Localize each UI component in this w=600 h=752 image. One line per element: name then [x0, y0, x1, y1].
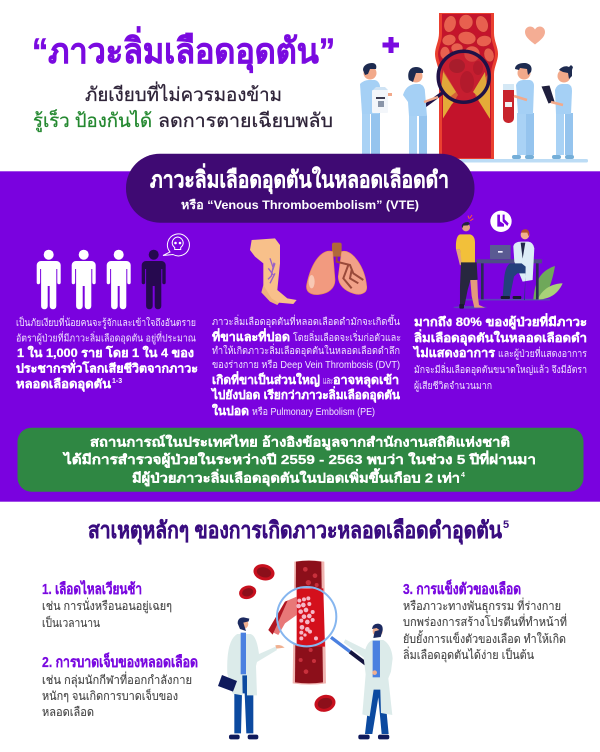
text block: middle column: ทำให้เกิดภาวะลิ่มเลือดอุดตันในหลอดเลือดดำลึก — [212, 343, 400, 357]
text block: cause 1 — [42, 579, 172, 630]
blood cells — [238, 562, 337, 714]
text block: cause 1: 1. เลือดไหลเวียนช้า — [42, 579, 142, 598]
text block: middle column — [210, 314, 401, 418]
callout: Thailand statistics — [18, 428, 584, 492]
panel: dark pill heading: ภาวะลิ่มเลือดอุดตันในหลอดเลือดดำ — [150, 162, 449, 194]
nurse with box — [360, 63, 392, 154]
magnified clot — [268, 587, 381, 675]
callout: Thailand statistics: 4 — [461, 472, 465, 479]
text block: cause 3: ยับยั้งการแข็งตัวของเลือด ทำให้เกิด — [403, 630, 566, 646]
icon: four people, one in four — [37, 234, 189, 309]
text block: left column: อัตราผู้ป่วยที่มีภาวะลิ่มเลือดอุดตัน อยู่ที่ประมาณ — [16, 331, 196, 345]
illustration: doctors examining a clot in a vessel — [218, 560, 393, 739]
text block: right column: มากถึง 80% ของผู้ป่วยที่มีภาวะ — [414, 313, 587, 330]
text block: cause 2: หลอดเลือด — [42, 705, 94, 719]
text block: middle column: โดยลิ่มเลือดจะเริ่มก่อตัวและ — [293, 330, 401, 344]
illustration: patient and doctor at desk — [453, 211, 563, 309]
text block: right column: และผู้ป่วยที่แสดงอาการ — [498, 346, 588, 360]
callout: Thailand statistics: ได้มีการสำรวจผู้ป่วยในระหว่างปี 2559 - 2563 พบว่า ในช่วง 5 ปีที่ผ่านมา — [62, 450, 536, 468]
text block: left column: หลอดเลือดอุดตัน — [16, 377, 112, 392]
text block: left column: 1 ใน 1,000 ราย โดย 1 ใน 4 ของ — [17, 345, 194, 360]
text block: left column: 1-3 — [112, 378, 122, 385]
doctor — [501, 229, 534, 300]
text block: middle column: ภาวะลิ่มเลือดอุดตันที่หลอดเลือดดำมักจะเกิดขึ้น — [212, 314, 400, 328]
nurse with magnifier — [403, 67, 438, 154]
text block: cause 3: ลิ่มเลือดอุดตันได้ง่าย เป็นต้น — [403, 646, 534, 663]
text block: cause 1: เช่น การนั่งหรือนอนอยู่เฉยๆ — [42, 597, 172, 614]
text block: middle column: และ — [323, 376, 333, 387]
vessel — [293, 560, 326, 685]
callout: Thailand statistics: มีผู้ป่วยภาวะลิ่มเลือดอุดตันในปอดเพิ่มขึ้นเกือบ 2 เท่า — [132, 467, 460, 486]
heading: main causes: สาเหตุหลักๆ ของการเกิดภาวะหลอดเลือดดำอุดตัน — [88, 517, 502, 545]
icon: lungs — [307, 243, 367, 295]
text block: right column: ผู้เสียชีวิตจำนวนมาก — [414, 380, 492, 392]
icon: leg with varicose veins — [250, 238, 297, 305]
text block: middle column: อาจหลุดเข้า — [333, 373, 399, 388]
subtitle — [33, 81, 333, 132]
floor strip — [460, 159, 588, 162]
text block: cause 3: 3. การแข็งตัวของเลือด — [403, 579, 521, 598]
text block: middle column: ในปอด — [212, 403, 249, 418]
text block: cause 2: หนักๆ จนเกิดการบาดเจ็บของ — [42, 688, 178, 703]
doctor right — [344, 624, 393, 739]
subtitle: รู้เร็ว ป้องกันได้ — [33, 108, 152, 132]
callout: Thailand statistics: สถานการณ์ในประเทศไทย อ้างอิงข้อมูลจากสำนักงานสถิติแห่งชาติ — [90, 434, 510, 451]
panel: dark pill heading: หรือ “Venous Thromboembolism” (VTE) — [181, 198, 419, 212]
text block: left column: เป็นภัยเงียบที่น้อยคนจะรู้จักและเข้าใจถึงอันตราย — [16, 315, 196, 329]
magnifier — [416, 51, 489, 112]
text block: cause 2: 2. การบาดเจ็บของหลอดเลือด — [42, 652, 198, 671]
subtitle: ภัยเงียบที่ไม่ควรมองข้าม — [85, 81, 282, 106]
text block: cause 2 — [42, 652, 198, 719]
icon: skull speech bubble — [163, 234, 189, 256]
desk and laptop — [477, 245, 542, 299]
text block: right column: ลิ่มเลือดอุดตันในหลอดเลือดดำ — [414, 329, 587, 346]
blood vessel — [435, 13, 498, 159]
icon: foot circle — [490, 211, 512, 232]
text block: middle column: เกิดที่ขาเป็นส่วนใหญ่ — [212, 371, 320, 387]
text block: cause 3 — [403, 579, 567, 663]
icon: heart — [525, 26, 545, 44]
plant — [533, 266, 563, 299]
heading: main causes: 5 — [503, 519, 509, 531]
nurse with blood tube — [503, 63, 534, 159]
text block: left column — [16, 315, 198, 392]
text block: left column: ประชากรทั่วโลกเสียชีวิตจากภาวะ — [16, 360, 198, 376]
icon: plus — [382, 37, 399, 53]
text block: right column: ไม่แสดงอาการ — [412, 345, 496, 360]
text block: cause 3: บกพร่องการสร้างโปรตีนที่ทำหน้าที่ — [403, 613, 567, 629]
subtitle: ลดการตายเฉียบพลับ — [158, 110, 333, 132]
text block: middle column: ที่ขาและที่ปอด — [212, 328, 290, 344]
text block: cause 3: หรือภาวะทางพันธุกรรม ที่ร่างกาย — [403, 597, 561, 614]
text block: middle column: ไปยังปอด เรียกว่าภาวะลิ่มเลือดอุดตัน — [210, 386, 401, 403]
text block: right column — [412, 313, 588, 392]
text block: cause 2: เช่น กลุ่มนักกีฬาที่ออกกำลังกาย — [42, 671, 192, 688]
doctor left — [218, 617, 285, 739]
panel: dark pill heading — [126, 154, 474, 223]
title: “ภาวะลิ่มเลือดอุดตัน” — [32, 26, 335, 73]
hero illustration: medical team inspecting a blood vessel — [360, 13, 588, 162]
panel: purple section background — [0, 171, 600, 502]
text block: middle column: ของร่างกาย หรือ Deep Vein Thrombosis (DVT) — [212, 359, 400, 371]
nurse with clipboard — [542, 65, 574, 159]
text block: cause 1: เป็นเวลานาน — [42, 615, 100, 630]
patient — [456, 215, 485, 309]
text block: middle column: หรือ Pulmonary Embolism (PE) — [252, 406, 375, 418]
